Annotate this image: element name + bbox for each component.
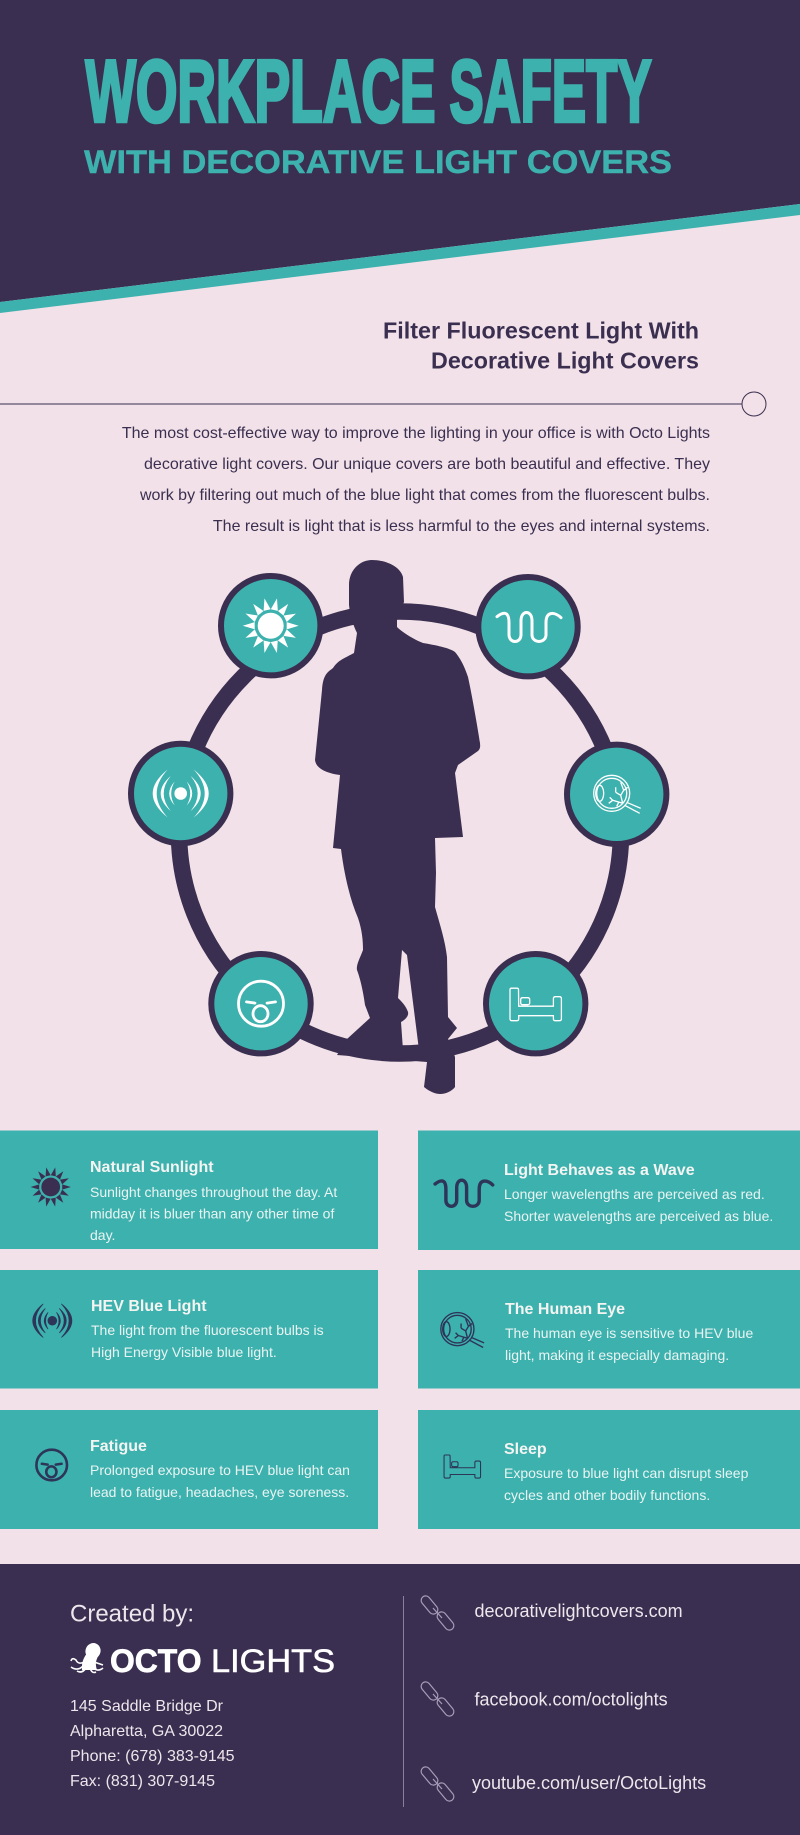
- panel: sleep: cycles and other bodily functions.: [504, 1487, 710, 1503]
- title: WORKPLACE: [86, 42, 436, 140]
- address: 145 Saddle Bridge Dr: [70, 1698, 224, 1715]
- panel: sleep: [418, 1410, 800, 1529]
- subtitle: WITH DECORATIVE LIGHT COVERS: [84, 144, 672, 180]
- panel: the human eye: [418, 1270, 800, 1388]
- intro paragraph: [122, 425, 710, 535]
- link: facebook: facebook.com/octolights: [474, 1690, 668, 1710]
- panel: light behaves as a wave: Light Behaves as a Wave: [504, 1162, 695, 1179]
- address: Fax: (831) 307-9145: [70, 1773, 215, 1790]
- icon: light waves: [33, 1304, 72, 1338]
- panel: fatigue: [0, 1410, 378, 1529]
- panel: light behaves as a wave: Longer wavelengths are perceived as red.: [504, 1186, 765, 1202]
- panel: the human eye: light, making it especially damaging.: [505, 1347, 729, 1363]
- panel: HEV blue light: The light from the fluorescent bulbs is: [91, 1322, 324, 1338]
- panel: sleep: Exposure to blue light can disrupt sleep: [504, 1465, 749, 1481]
- panel: natural sunlight: day.: [90, 1227, 115, 1243]
- link: website: decorativelightcovers.com: [474, 1601, 683, 1621]
- panel: light behaves as a wave: Shorter wavelengths are perceived as blue.: [504, 1208, 773, 1224]
- node: sun: [221, 576, 320, 675]
- panel: natural sunlight: [0, 1130, 378, 1249]
- panel: sleep: Sleep: [504, 1441, 547, 1458]
- icon: sun: [31, 1167, 71, 1207]
- panel: the human eye: The human eye is sensitive to HEV blue: [505, 1325, 753, 1341]
- intro paragraph: work by filtering out much of the blue light that comes from the fluorescent bulbs.: [139, 487, 710, 504]
- icon: yawning face: [36, 1450, 67, 1480]
- panel: fatigue: lead to fatigue, headaches, eye soreness.: [90, 1484, 349, 1500]
- panel: fatigue: Fatigue: [90, 1438, 147, 1455]
- icon: bed: [444, 1455, 481, 1478]
- node: eye: [567, 745, 666, 844]
- created by label: Created by:: [70, 1600, 194, 1628]
- section heading: Filter Fluorescent Light With: [383, 318, 699, 344]
- panel: natural sunlight: Sunlight changes throughout the day. At: [90, 1184, 337, 1200]
- logo wordmark: OCTO: [110, 1643, 202, 1679]
- intro paragraph: The most cost-effective way to improve the lighting in your office is with Octo Lights: [122, 425, 710, 442]
- diagram: person in ring of icons: [131, 560, 666, 1094]
- panel: light behaves as a wave: [418, 1130, 800, 1250]
- address: [70, 1698, 235, 1790]
- panel: the human eye: The Human Eye: [505, 1301, 625, 1318]
- divider with circle marker: [0, 392, 766, 416]
- panel: fatigue: Prolonged exposure to HEV blue light can: [90, 1462, 350, 1478]
- link: website: [419, 1594, 683, 1632]
- address: Phone: (678) 383-9145: [70, 1748, 235, 1765]
- panel: HEV blue light: High Energy Visible blue light.: [91, 1344, 277, 1360]
- header banner: [0, 0, 800, 313]
- person silhouette: [315, 560, 480, 1094]
- section heading: Decorative Light Covers: [431, 348, 699, 374]
- footer: LIGHTS: [211, 1643, 335, 1679]
- link: facebook: [419, 1680, 668, 1718]
- ring: [179, 612, 621, 1054]
- intro paragraph: decorative light covers. Our unique covers are both beautiful and effective. They: [144, 456, 710, 473]
- link: youtube: [419, 1765, 706, 1803]
- node: light waves: [131, 744, 230, 843]
- footer: [0, 1564, 800, 1835]
- icon: octopus logo: [71, 1641, 103, 1672]
- node: wave: [478, 577, 578, 676]
- panel: HEV blue light: [0, 1270, 378, 1388]
- title: SAFETY: [450, 42, 652, 140]
- panel: natural sunlight: Natural Sunlight: [90, 1159, 214, 1176]
- node: bed: [486, 954, 585, 1053]
- node: yawning face: [211, 954, 311, 1053]
- link: youtube: youtube.com/user/OctoLights: [472, 1773, 706, 1793]
- panel: HEV blue light: HEV Blue Light: [91, 1298, 207, 1315]
- intro paragraph: The result is light that is less harmful to the eyes and internal systems.: [213, 518, 710, 535]
- panel: natural sunlight: midday it is bluer than any other time of: [90, 1206, 334, 1222]
- section heading: [383, 318, 699, 374]
- address: Alpharetta, GA 30022: [70, 1723, 223, 1740]
- icon: wave: [435, 1180, 493, 1206]
- icon: eye: [441, 1313, 484, 1347]
